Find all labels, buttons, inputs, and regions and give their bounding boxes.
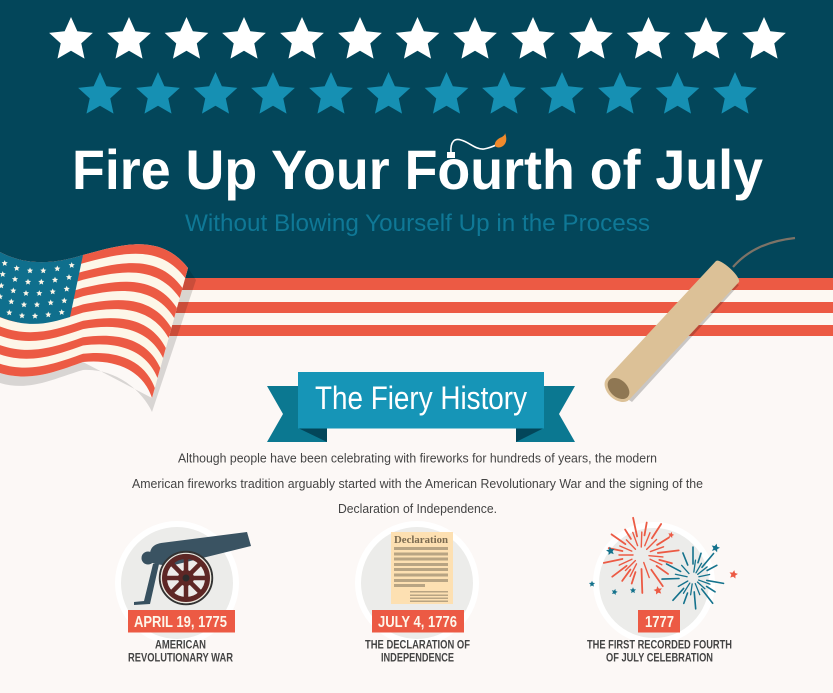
date badge: APRIL 19, 1775 — [134, 614, 227, 631]
panel: American Revolutionary War — [115, 521, 251, 664]
subtitle: Without Blowing Yourself Up in the Process — [185, 210, 650, 237]
caption: AMERICAN — [155, 640, 206, 652]
icon: blue firework burst — [662, 547, 724, 609]
icon: waving American flag — [0, 244, 196, 412]
caption — [587, 640, 732, 664]
intro paragraph: Declaration of Independence. — [338, 502, 497, 516]
caption: INDEPENDENCE — [381, 652, 454, 664]
ribbon heading — [267, 372, 575, 442]
icon: small stars — [589, 531, 738, 595]
icon: firecracker — [599, 238, 795, 407]
blue star row — [78, 72, 757, 114]
icon: declaration document — [391, 532, 453, 604]
caption: THE FIRST RECORDED FOURTH — [587, 640, 732, 652]
date badge — [128, 610, 235, 632]
icon: red firework burst — [604, 518, 679, 593]
caption: OF JULY CELEBRATION — [606, 652, 713, 664]
icon: bomb fuse on title letter — [447, 133, 506, 158]
intro paragraph: Although people have been celebrating with fireworks for hundreds of years, the modern — [178, 452, 657, 466]
caption — [128, 640, 234, 664]
caption — [365, 640, 470, 664]
date badge — [372, 610, 464, 632]
title: Fire Up Your Fourth of July — [72, 138, 763, 201]
caption: THE DECLARATION OF — [365, 640, 470, 652]
icon: declaration document: Declaration — [394, 535, 448, 546]
date badge: JULY 4, 1776 — [378, 614, 457, 631]
intro paragraph — [132, 452, 703, 516]
intro paragraph: American fireworks tradition arguably started with the American Revolutionary War and the signing of the — [132, 477, 703, 491]
white star row — [49, 17, 786, 59]
caption: REVOLUTIONARY WAR — [128, 652, 234, 664]
ribbon heading: The Fiery History — [315, 380, 527, 416]
panel: Declaration of Independence — [355, 521, 479, 664]
date badge: 1777 — [645, 614, 674, 631]
icon: cannon — [134, 532, 251, 605]
panel: first Fourth of July celebration — [587, 518, 738, 664]
date badge — [638, 610, 680, 632]
